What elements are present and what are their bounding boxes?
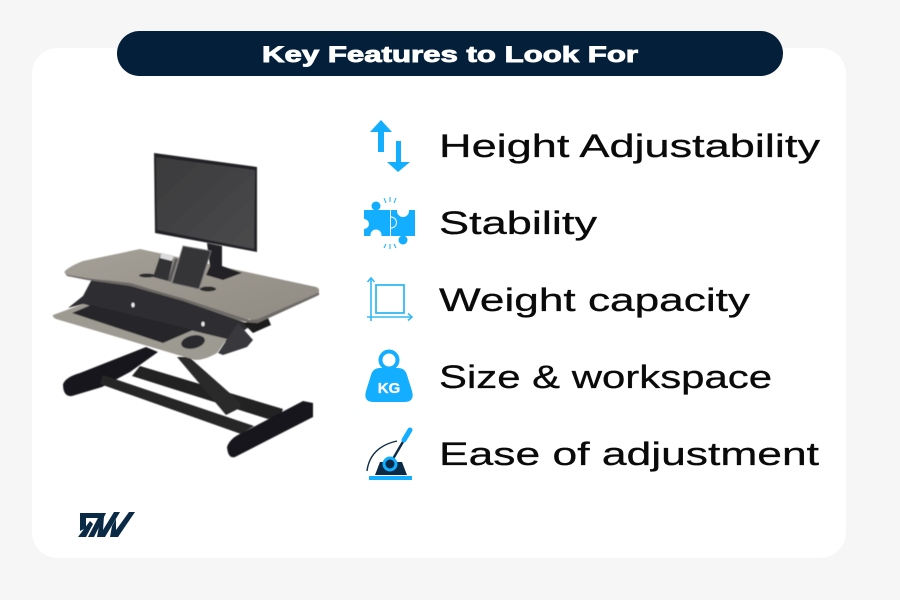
monitor xyxy=(154,153,257,252)
icon: puzzle xyxy=(359,197,415,249)
icon: KG weight: KG xyxy=(378,380,400,397)
under-desk housing xyxy=(68,279,252,342)
knob xyxy=(243,318,271,333)
keyboard tray xyxy=(53,304,227,360)
rear rail xyxy=(132,366,283,419)
right foot xyxy=(227,401,313,457)
desk surface xyxy=(64,249,319,320)
desk slots xyxy=(139,274,155,278)
illustration: standing desk converter with monitor xyxy=(53,153,319,457)
tray side bracket xyxy=(218,323,253,355)
feature: stability: Stability xyxy=(439,205,597,241)
mouse xyxy=(180,333,206,351)
scissor arm xyxy=(177,357,241,415)
desk edge xyxy=(65,273,319,323)
icon: dimensions xyxy=(367,278,412,321)
icon: KG weight xyxy=(365,352,413,402)
icon: lever xyxy=(367,430,412,480)
logo xyxy=(78,512,135,537)
left foot and arm xyxy=(63,347,158,396)
title banner: Key Features to Look For xyxy=(262,42,638,67)
monitor stand xyxy=(206,243,242,280)
front rail xyxy=(100,375,254,434)
feature: height adjustability: Height Adjustability xyxy=(439,128,820,164)
feature: ease of adjustment: Ease of adjustment xyxy=(439,436,819,472)
feature: weight capacity: Weight capacity xyxy=(439,282,750,318)
feature: size and workspace: Size & workspace xyxy=(439,359,772,395)
icon: height arrows xyxy=(370,120,410,172)
keyboard xyxy=(72,305,193,343)
grommets xyxy=(131,303,135,307)
panel: white card xyxy=(32,48,846,558)
tablet xyxy=(172,246,211,289)
title banner xyxy=(117,31,783,76)
phone xyxy=(153,253,174,281)
